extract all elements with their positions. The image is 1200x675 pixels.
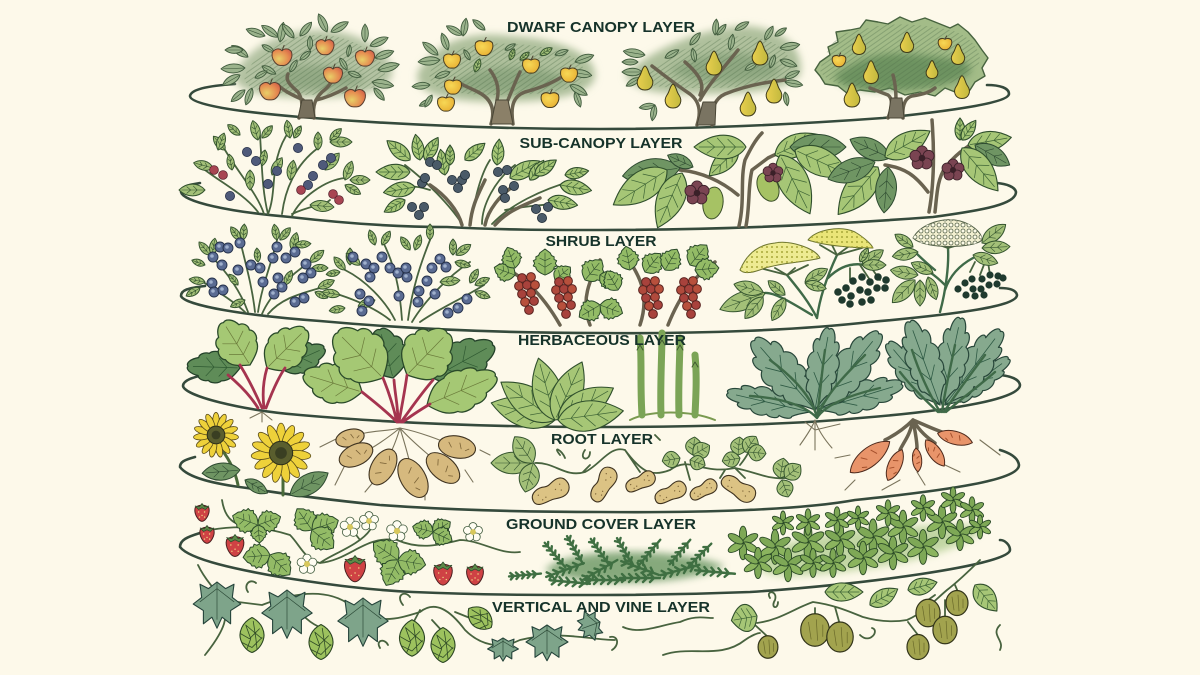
ring: ground cover	[180, 533, 1010, 595]
plant: sweet potatoes	[835, 420, 1000, 490]
tree: yellow apple 2	[412, 17, 595, 124]
plant: thyme	[509, 535, 735, 588]
shrub: red currants	[491, 238, 720, 326]
tree: pawpaw right	[824, 117, 1014, 224]
shrub: dark berry bush	[376, 133, 593, 225]
shrub: mixed berries	[179, 120, 370, 216]
plant: chard	[298, 313, 504, 424]
ring: shrub	[181, 286, 1017, 333]
plant: asparagus	[630, 333, 715, 420]
plant: sunflowers	[193, 412, 333, 504]
tree: apple 1	[221, 12, 400, 118]
layer: herbaceous	[183, 311, 1020, 450]
layer: sub-canopy	[179, 117, 1016, 233]
tree: pawpaw left	[605, 125, 855, 233]
label: shrub layer: SHRUB LAYER	[546, 233, 657, 250]
layer: root	[180, 412, 1019, 512]
plant: kiwi vine	[623, 560, 1004, 660]
label: herbaceous layer: HERBACEOUS LAYER	[518, 332, 686, 349]
plant: clover	[727, 487, 992, 582]
shrub: elderberry left	[717, 229, 890, 323]
label: dwarf canopy layer: DWARF CANOPY LAYER	[507, 19, 695, 36]
plant: peanuts	[491, 431, 806, 509]
label: sub-canopy layer: SUB-CANOPY LAYER	[520, 135, 683, 152]
shrub: blueberry left	[184, 224, 336, 314]
plant: spinach	[487, 354, 625, 435]
ring: dwarf canopy	[190, 84, 1009, 129]
label: vertical and vine layer: VERTICAL AND VINE LAYER	[492, 599, 710, 616]
plant: tubers	[320, 426, 490, 503]
ring: sub-canopy	[181, 183, 1016, 230]
plant: strawberries	[195, 500, 520, 591]
layer: vertical and vine	[193, 560, 1004, 662]
shrub: blueberry right	[322, 224, 491, 322]
tree: pear 4	[815, 17, 988, 118]
shrub: elderberry right	[887, 219, 1010, 312]
layer: ground cover	[180, 487, 1010, 595]
plant: kale right	[876, 314, 1016, 415]
plant: kale left	[724, 321, 907, 450]
tree: pear 3	[622, 19, 803, 125]
label: root layer: ROOT LAYER	[551, 431, 653, 448]
ring: root	[180, 450, 1019, 512]
plant: hops vine	[193, 565, 617, 662]
layer: shrub	[181, 219, 1017, 333]
ring: herbaceous	[183, 373, 1020, 427]
label: ground cover layer: GROUND COVER LAYER	[506, 516, 696, 533]
layer: dwarf canopy	[190, 12, 1009, 129]
plant: rhubarb	[187, 311, 330, 422]
